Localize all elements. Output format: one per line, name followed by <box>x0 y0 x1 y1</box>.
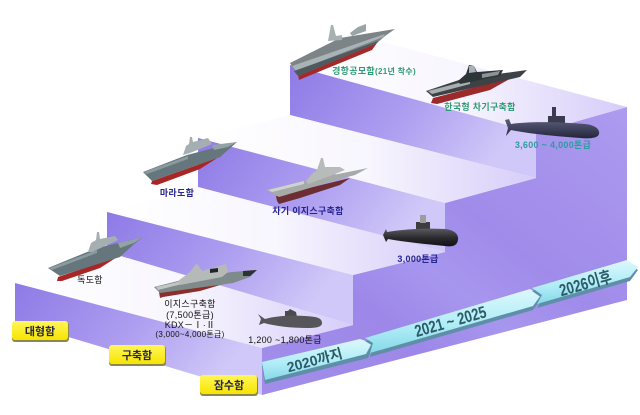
submarine: 3600 to 4000 ton <box>505 107 599 138</box>
label: Aegis destroyer specs <box>155 299 225 339</box>
arrow: 2021 to 2025: 2021 ~ 2025 <box>413 303 489 341</box>
tread: third step <box>198 115 536 203</box>
arrow: after 2026 <box>532 260 638 308</box>
label: Aegis destroyer specs: 이지스구축함 <box>164 299 216 309</box>
label: light carrier: 경항공모함(21년 착수) <box>332 65 416 76</box>
label: 3600 to 4000 ton submarine: 3,600 ~ 4,000톤급 <box>515 140 591 150</box>
ships <box>48 24 599 328</box>
ship: next Aegis destroyer <box>266 158 368 204</box>
submarine: small <box>258 309 322 328</box>
ship: Dokdo <box>48 232 143 281</box>
label: 3000 ton submarine: 3,000톤급 <box>397 254 439 264</box>
arrow: after 2026: 2026이후 <box>557 268 614 301</box>
ship: next Korean destroyer <box>426 65 527 104</box>
label: Aegis destroyer specs: KDX－Ⅰ·Ⅱ <box>165 320 215 330</box>
riser: second step <box>107 212 353 325</box>
tread: second step <box>107 187 445 275</box>
timeline arrows <box>262 260 638 384</box>
riser: third step <box>198 138 445 252</box>
arrow: until 2020: 2020까지 <box>285 345 344 375</box>
side face of staircase <box>262 107 627 395</box>
ship labels <box>77 65 591 345</box>
ship: light aircraft carrier <box>290 24 395 80</box>
label: Marado: 마라도함 <box>160 187 195 198</box>
label: Aegis destroyer specs: (7,500톤급) <box>166 310 214 320</box>
tag: destroyers: 구축함 <box>122 348 152 362</box>
tag: submarines: 잠수함 <box>214 378 244 392</box>
ship: Aegis destroyer <box>154 264 257 298</box>
label: next Korean destroyer: 한국형 차기구축함 <box>444 101 516 112</box>
arrow: 2021 to 2025 <box>365 289 542 357</box>
category tags <box>12 321 258 396</box>
submarine: 3000 ton <box>383 215 458 246</box>
tag: large ships: 대형함 <box>25 324 55 338</box>
riser: first step <box>15 283 262 395</box>
riser: top step <box>290 65 536 178</box>
ship: Marado <box>143 137 237 185</box>
tag: destroyers <box>109 345 166 366</box>
label: next Aegis destroyer: 차기 이지스구축함 <box>272 205 344 216</box>
label: Aegis destroyer specs: (3,000~4,000톤급) <box>155 330 225 339</box>
label: Dokdo: 독도함 <box>77 275 103 285</box>
tread: top step <box>290 42 627 133</box>
tag: large ships <box>12 321 69 342</box>
tag: submarines <box>200 375 258 396</box>
label: small submarine tonnage: 1,200 ~1,800톤급 <box>248 335 322 345</box>
tread: first step <box>15 252 353 348</box>
arrow: until 2020 <box>262 339 373 384</box>
